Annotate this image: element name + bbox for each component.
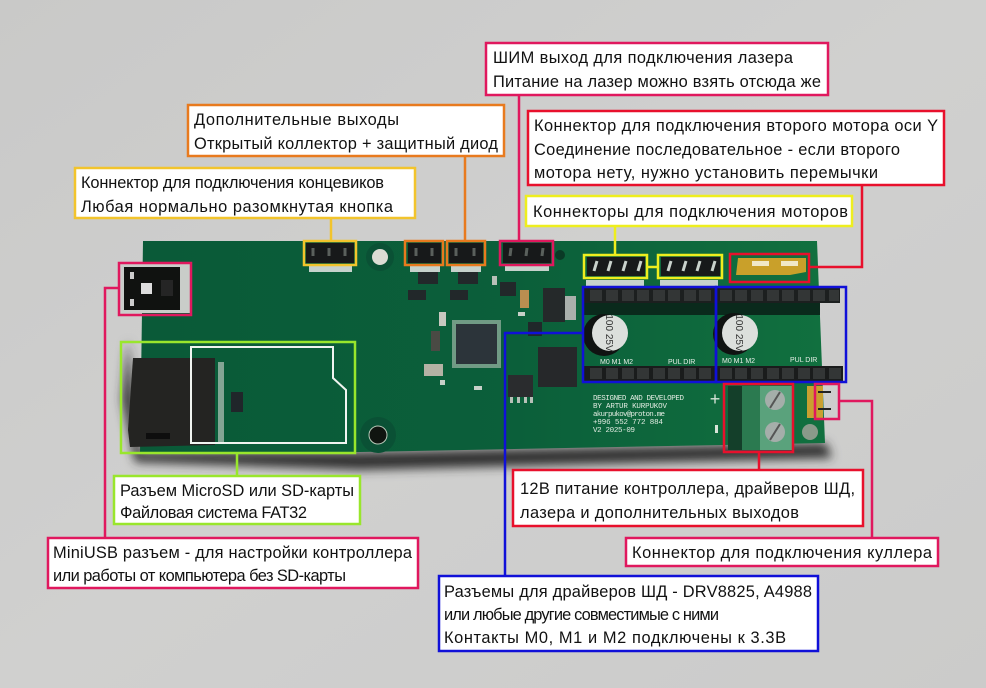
- callout: second Y motor connector: Коннектор для подключения второго мотора оси Y: [534, 117, 938, 135]
- capacitors: [583, 313, 758, 356]
- capacitors: 100 25V: [733, 314, 744, 352]
- callout: second Y motor connector: Соединение последовательное - если второго: [534, 141, 900, 159]
- designer credit: +: [710, 389, 720, 409]
- callout: second Y motor connector: мотора нету, нужно установить перемычки: [534, 164, 878, 182]
- callout: stepper driver sockets: Разъемы для драйверов ШД - DRV8825, A4988: [444, 583, 812, 601]
- motor jumpers: [736, 258, 806, 275]
- callout: additional outputs: Дополнительные выходы: [194, 111, 399, 129]
- callout: MiniUSB: MiniUSB разъем - для настройки контроллера: [53, 544, 413, 562]
- pin labels on board: M0 M1 M2: [722, 358, 755, 365]
- callout: motor connectors: [526, 196, 852, 226]
- callout: 12V power: лазера и дополнительных выходов: [520, 504, 799, 522]
- pin labels on board: PUL DIR: [790, 357, 817, 364]
- board shadow: [122, 340, 832, 470]
- callout: 12V power: [513, 470, 863, 526]
- power terminal: [728, 386, 792, 450]
- callout: SD card: Файловая система FAT32: [120, 504, 307, 522]
- SD slot: [128, 347, 346, 447]
- callout: stepper driver sockets: или любые другие совместимые с ними: [444, 606, 719, 624]
- capacitors: 100 25V: [603, 314, 614, 352]
- callout: endstop connector: Коннектор для подключения концевиков: [81, 174, 384, 192]
- pin headers: [306, 243, 720, 276]
- MCU and power components: [408, 272, 577, 403]
- callout: PWM laser output: [486, 43, 828, 95]
- callout: 12V power: 12В питание контроллера, драйверов ШД,: [520, 480, 855, 498]
- callout: MiniUSB: или работы от компьютера без SD-карты: [53, 567, 346, 585]
- callout: fan connector: [626, 538, 938, 566]
- designer credit: [593, 389, 720, 435]
- callout: PWM laser output: Питание на лазер можно взять отсюда же: [493, 73, 821, 91]
- callout: fan connector: Коннектор для подключения куллера: [632, 544, 933, 562]
- callout: stepper driver sockets: [439, 576, 818, 651]
- mounting holes: [360, 243, 818, 453]
- designer credit: DESIGNED AND DEVELOPED: [593, 395, 684, 403]
- pin labels on board: M0 M1 M2: [600, 359, 633, 366]
- callout: additional outputs: Открытый коллектор + защитный диод: [194, 135, 498, 153]
- designer credit: +996 552 772 884: [593, 419, 663, 427]
- USB connector: [122, 263, 190, 313]
- callout: endstop connector: [75, 168, 415, 218]
- silkscreen strips: [309, 266, 718, 287]
- callout: additional outputs: [188, 105, 504, 156]
- designer credit: akurpukov@proton.me: [593, 411, 665, 419]
- callout: MiniUSB: [48, 538, 418, 588]
- designer credit: V2 2025-09: [593, 427, 635, 435]
- callout: stepper driver sockets: Контакты M0, M1 и M2 подключены к 3.3В: [444, 629, 786, 647]
- circuit board: [122, 241, 843, 453]
- pin labels on board: [600, 357, 817, 366]
- callout: SD card: Разъем MicroSD или SD-карты: [120, 482, 354, 500]
- highlight frames: [119, 241, 846, 453]
- callout: SD card: [114, 476, 360, 524]
- driver sockets: [584, 288, 843, 381]
- callout: PWM laser output: ШИМ выход для подключения лазера: [493, 49, 794, 67]
- designer credit: BY ARTUR KURPUKOV: [593, 403, 667, 411]
- callout: second Y motor connector: [528, 111, 944, 185]
- callout: motor connectors: Коннекторы для подключения моторов: [533, 203, 848, 221]
- callout: endstop connector: Любая нормально разомкнутая кнопка: [81, 198, 394, 216]
- fan connector: [807, 386, 831, 418]
- leader lines: [105, 95, 872, 576]
- pin labels on board: PUL DIR: [668, 359, 695, 366]
